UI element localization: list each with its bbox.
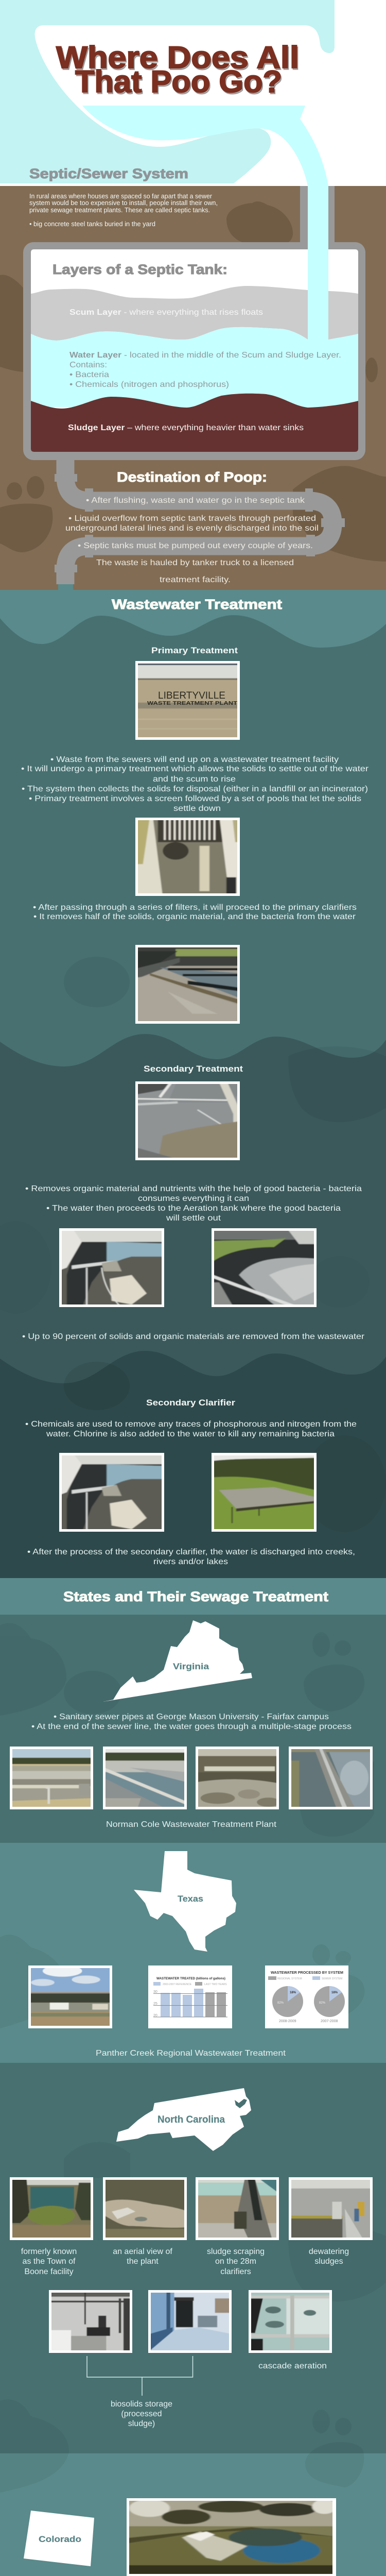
water layer (31, 327, 358, 407)
heading: septic sewer system: Septic/Sewer System (29, 166, 188, 181)
primary treatment text: and the scum to rise (153, 775, 236, 784)
photo: biosolids interior (47, 2290, 134, 2353)
secondary clarifier result text (27, 1548, 355, 1566)
intro text: system would be too expensive to install, people install their own, (29, 199, 218, 207)
secondary treatment text: • The water then proceeds to the Aeration tank where the good bacteria (46, 1204, 341, 1213)
heading: secondary treatment: Secondary Treatment (144, 1064, 243, 1074)
chart: wastewater processed pies: 2008-2009 (279, 2020, 296, 2023)
primary treatment text (21, 755, 369, 813)
primary treatment text: • The system then collects the solids for disposal (either in a landfill or an incinerator) (22, 785, 368, 793)
heading: destination of poop: Destination of Poop: (117, 469, 267, 485)
photo: Norman Cole 4 (287, 1746, 374, 1810)
photo: Norman Cole 2 (101, 1746, 188, 1810)
secondary treatment text: • Removes organic material and nutrients with the help of good bacteria - bacteria (25, 1184, 362, 1193)
caption: biosolids storage: (processed (121, 2410, 162, 2418)
map: North Carolina (116, 2088, 251, 2151)
intro text: • big concrete steel tanks buried in the yard (29, 220, 155, 228)
destination text: treatment facility. (160, 575, 231, 584)
caption: Panther Creek: Panther Creek Regional Wastewater Treatment (96, 2049, 286, 2058)
caption: dewatering: sludges (314, 2257, 343, 2266)
secondary treatment text: consumes everything it can (138, 1194, 249, 1203)
photo: aeration tank right (209, 1227, 319, 1308)
secondary clarifier text: • Chemicals are used to remove any traces of phosphorous and nitrogen from the (25, 1420, 357, 1429)
title: Where Does All (57, 42, 300, 76)
chart: wastewater processed pies: 18% (331, 1991, 338, 1994)
chart: wastewater processed pies: 82% (319, 2002, 326, 2005)
photo: secondary clarifier tank (57, 1452, 167, 1533)
secondary clarifier result text: rivers and/or lakes (153, 1557, 228, 1566)
intro text (29, 192, 218, 228)
photo: Norman Cole 3 (194, 1746, 280, 1810)
caption: sludge scraping (207, 2247, 265, 2276)
photo: sludge scraping (194, 2177, 280, 2241)
intro text: private sewage treatment plants. These are called septic tanks. (29, 206, 210, 214)
map: Colorado (24, 2511, 94, 2566)
photo: primary clarifier (133, 944, 242, 1025)
title: Where Does All (56, 40, 299, 75)
chart: wastewater treated bars: 25 (153, 2002, 157, 2006)
Virginia text: • Sanitary sewer pipes at George Mason University - Fairfax campus (54, 1713, 329, 1721)
caption: dewatering: dewatering (309, 2247, 349, 2256)
photo: Norman Cole 1 (8, 1746, 95, 1810)
pipe: winding outflow (55, 460, 345, 584)
destination text: The waste is hauled by tanker truck to a licensed (96, 558, 294, 567)
secondary result text: • Up to 90 percent of solids and organic materials are removed from the wastewater (22, 1332, 365, 1341)
destination text: • Liquid overflow from septic tank travels through perforated (68, 514, 316, 523)
caption: formerly known: Boone facility (24, 2267, 74, 2276)
primary treatment text: • It will undergo a primary treatment which allows the solids to settle out of the water (21, 765, 369, 773)
photo: foam on water (133, 1080, 242, 1161)
chart: wastewater processed pies: SEWER SYSTEM (322, 1977, 342, 1980)
panel: septic tank (23, 186, 365, 460)
water layer text (69, 351, 341, 389)
photo: cascade aeration (247, 2290, 334, 2353)
water layer text: • Chemicals (nitrogen and phosphorus) (69, 380, 229, 389)
photo: outfall on grass (209, 1452, 319, 1533)
intro text: In rural areas where houses are spaced so far apart that a sewer (29, 192, 213, 200)
panel: wastewater treatment backgrounds (0, 584, 386, 1578)
caption: Norman Cole plant: Norman Cole Wastewater Treatment Plant (106, 1820, 277, 1829)
destination text: • Septic tanks must be pumped out every couple of years. (78, 541, 313, 550)
caption: aerial view (113, 2247, 172, 2266)
photo: Town of Boone sign (8, 2177, 95, 2242)
water layer text: Contains: (69, 361, 107, 369)
primary clarifier text: • It removes half of the solids, organic material, and the bacteria from the water (33, 912, 356, 921)
map: North Carolina: North Carolina (157, 2114, 225, 2125)
caption: cascade aeration: cascade aeration (258, 2362, 327, 2370)
chart: wastewater processed pies: 2007-2008 (321, 2020, 338, 2023)
chart: wastewater processed pies (265, 1965, 348, 2028)
photo: Libertyville plant sign (133, 660, 242, 741)
bracket: biosolids connector (87, 2356, 192, 2396)
scum layer text: Scum Layer - where everything that rises floats (69, 308, 263, 317)
title: That Poo Go? (75, 64, 282, 99)
caption: sludge scraping: sludge scraping (207, 2247, 265, 2256)
chart: wastewater processed pies: WASTEWATER PROCESSED BY SYSTEM (271, 1971, 343, 1975)
heading: layers of a septic tank: Layers of a Septic Tank: (52, 262, 227, 277)
caption: biosolids storage: sludge) (128, 2419, 155, 2428)
heading: wastewater treatment: Wastewater Treatment (112, 597, 282, 612)
destination text: underground lateral lines and is evenly discharged into the soil (65, 524, 319, 533)
caption: sludge scraping: clarifiers (220, 2267, 251, 2276)
map: Colorado: Colorado (39, 2534, 81, 2544)
caption: formerly known: formerly known (21, 2247, 77, 2256)
title: That Poo Go? (76, 66, 283, 100)
chart: wastewater treated bars: 20 (153, 2014, 157, 2018)
chart: wastewater treated bars: WASTEWATER TREATED (billions of gallons) (156, 1977, 225, 1980)
photo: aerial view (101, 2177, 188, 2241)
map: Texas: Texas (178, 1894, 203, 1904)
heading: secondary clarifier: Secondary Clarifier (146, 1398, 235, 1408)
caption: sludge scraping: on the 28m (215, 2257, 256, 2266)
secondary clarifier text: water. Chlorine is also added to the water to kill any remaining bacteria (46, 1430, 335, 1438)
water pipe (308, 186, 328, 340)
chart: wastewater processed pies: 82% (277, 2002, 284, 2005)
panel: states backgrounds (0, 1578, 386, 2576)
panel: soil background (0, 186, 386, 590)
heading: primary treatment: Primary Treatment (151, 646, 238, 655)
chart: wastewater treated bars: LAST TWO YEARS (204, 1983, 227, 1986)
secondary treatment text: will settle out (166, 1214, 221, 1223)
photo: biosolids storage (147, 2290, 233, 2353)
destination text: • After flushing, waste and water go in the septic tank (86, 496, 305, 505)
primary treatment text: settle down (173, 804, 221, 813)
primary clarifier text (33, 903, 357, 921)
title (56, 40, 300, 100)
water layer text: Water Layer - located in the middle of the Scum and Sludge Layer. (69, 351, 341, 360)
chart: wastewater treated bars (148, 1965, 232, 2028)
secondary clarifier result text: • After the process of the secondary clarifier, the water is discharged into creeks, (27, 1548, 355, 1556)
photo: screen channel (133, 817, 242, 897)
chart: wastewater treated bars: 2003-2007 REFERENCE (163, 1983, 192, 1986)
primary clarifier text: • After passing through a series of filters, it will proceed to the primary clarifiers (33, 903, 357, 912)
chart: wastewater processed pies: REGIONAL SYSTEM (277, 1977, 302, 1980)
photo: Libertyville plant sign: WASTE TREATMENT PLANT (147, 701, 237, 706)
caption: biosolids storage: biosolids storage (111, 2400, 172, 2409)
photo: Panther Creek plant (27, 1965, 114, 2029)
chart: wastewater treated bars: 30 (153, 1990, 157, 1994)
caption: aerial view: the plant (127, 2257, 159, 2266)
photo: aeration tank left (57, 1227, 167, 1308)
scum layer (31, 286, 358, 341)
secondary treatment text (25, 1184, 362, 1223)
photo: Aspen treatment facility (119, 2497, 343, 2576)
destination text (65, 496, 319, 584)
water layer text: • Bacteria (69, 370, 109, 379)
map: Texas (134, 1851, 236, 1952)
sludge layer text: Sludge Layer – where everything heavier than water sinks (68, 423, 304, 432)
Virginia text: • At the end of the sewer line, the water goes through a multiple-stage process (31, 1722, 352, 1731)
map: Virginia (103, 1620, 252, 1702)
caption: dewatering (309, 2247, 349, 2266)
chart: wastewater processed pies: 18% (290, 1991, 296, 1994)
caption: formerly known: as the Town of (23, 2257, 76, 2266)
caption: aerial view: an aerial view of (113, 2247, 172, 2256)
photo: dewatering (287, 2177, 374, 2241)
map: Virginia: Virginia (173, 1662, 209, 1671)
Virginia text (31, 1713, 352, 1731)
secondary clarifier text (25, 1420, 357, 1438)
caption: formerly known (21, 2247, 77, 2276)
heading: states and their sewage treatment: States and Their Sewage Treatment (63, 1589, 328, 1604)
toilet illustration background (0, 0, 335, 186)
sludge layer (31, 394, 358, 452)
primary treatment text: • Waste from the sewers will end up on a wastewater treatment facility (50, 755, 339, 764)
primary treatment text: • Primary treatment involves a screen followed by a set of pools that let the solids (29, 794, 361, 803)
caption: biosolids storage (111, 2400, 172, 2428)
photo: Libertyville plant sign: LIBERTYVILLE (158, 690, 225, 701)
